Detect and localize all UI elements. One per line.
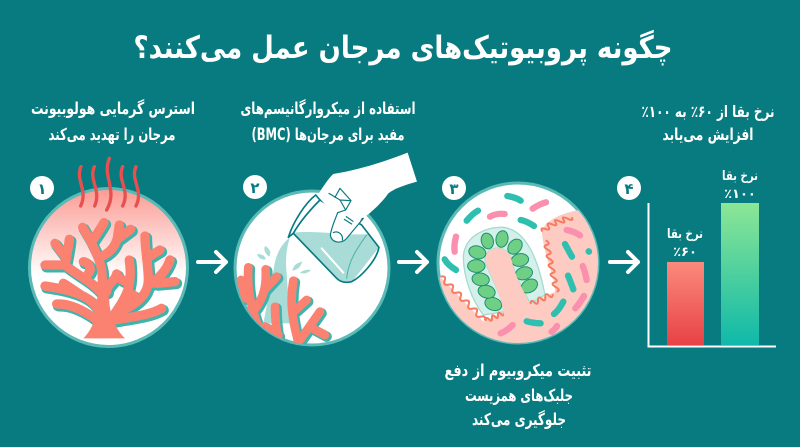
panel: microbiome stabilisation	[436, 182, 600, 344]
villus	[485, 248, 530, 316]
step 4 caption: نرخ بقا از ۶۰٪ به ۱۰۰٪	[642, 102, 774, 121]
badge 1	[30, 176, 54, 200]
badge 3: ۳	[449, 180, 459, 198]
water stream and droplets	[257, 237, 311, 323]
badge 4: ۴	[624, 180, 634, 198]
label 100%: نرخ بقا	[722, 169, 758, 184]
step 2 caption: مفید برای مرجان‌ها (BMC)	[252, 125, 404, 145]
symbiont sac	[463, 227, 545, 315]
step 1 caption	[31, 98, 195, 145]
label 100%	[722, 169, 758, 202]
tissue	[440, 210, 598, 343]
badge 2: ۲	[250, 179, 260, 197]
step 4 caption	[642, 102, 774, 145]
icon: heat waves	[79, 158, 139, 210]
badge 3	[442, 176, 466, 200]
pink bacteria	[454, 202, 587, 333]
panel: heat stress on coral	[30, 158, 188, 346]
badge 1: ۱	[37, 180, 47, 198]
step 3 caption: جلبک‌های همزیست	[465, 386, 573, 406]
algal cells	[467, 230, 540, 313]
label 100%: ٪۱۰۰	[724, 187, 756, 202]
step 1 caption: مرجان را تهدید می‌کند	[48, 125, 176, 145]
hand	[318, 153, 417, 242]
tissue wavy edge	[441, 217, 572, 321]
arrow 1	[198, 252, 226, 272]
step 1 caption: استرس گرمایی هولوبیونت	[31, 98, 195, 119]
step 2 caption: استفاده از میکروارگانیسم‌های	[240, 98, 416, 119]
badge 4	[617, 176, 641, 200]
teal bacteria	[445, 196, 589, 323]
step 4 caption: افزایش می‌یابد	[662, 125, 754, 145]
coral with algae	[45, 223, 177, 338]
step 3 caption: تثبیت میکروبیوم از دفع	[444, 361, 592, 381]
label 60%: نرخ بقا	[667, 227, 703, 242]
icon: beaker and hand	[288, 153, 417, 282]
step 3 caption: جلوگیری می‌کند	[472, 409, 566, 430]
panel: pouring beneficial microbes	[235, 153, 417, 345]
step 3 caption	[444, 361, 592, 430]
arrow 2	[399, 252, 427, 272]
axes	[648, 203, 776, 346]
label 60%: ٪۶۰	[673, 245, 697, 260]
coral branches	[241, 267, 327, 342]
label 60%	[667, 227, 703, 260]
arrow 3	[610, 252, 638, 272]
bar 100%	[721, 203, 759, 345]
title: چگونه پروبیوتیک‌های مرجان عمل می‌کنند؟	[134, 29, 672, 66]
step 2 caption	[240, 98, 416, 145]
badge 2	[243, 175, 267, 199]
bar chart: survival rate	[648, 169, 776, 346]
bar 60%	[667, 262, 704, 345]
